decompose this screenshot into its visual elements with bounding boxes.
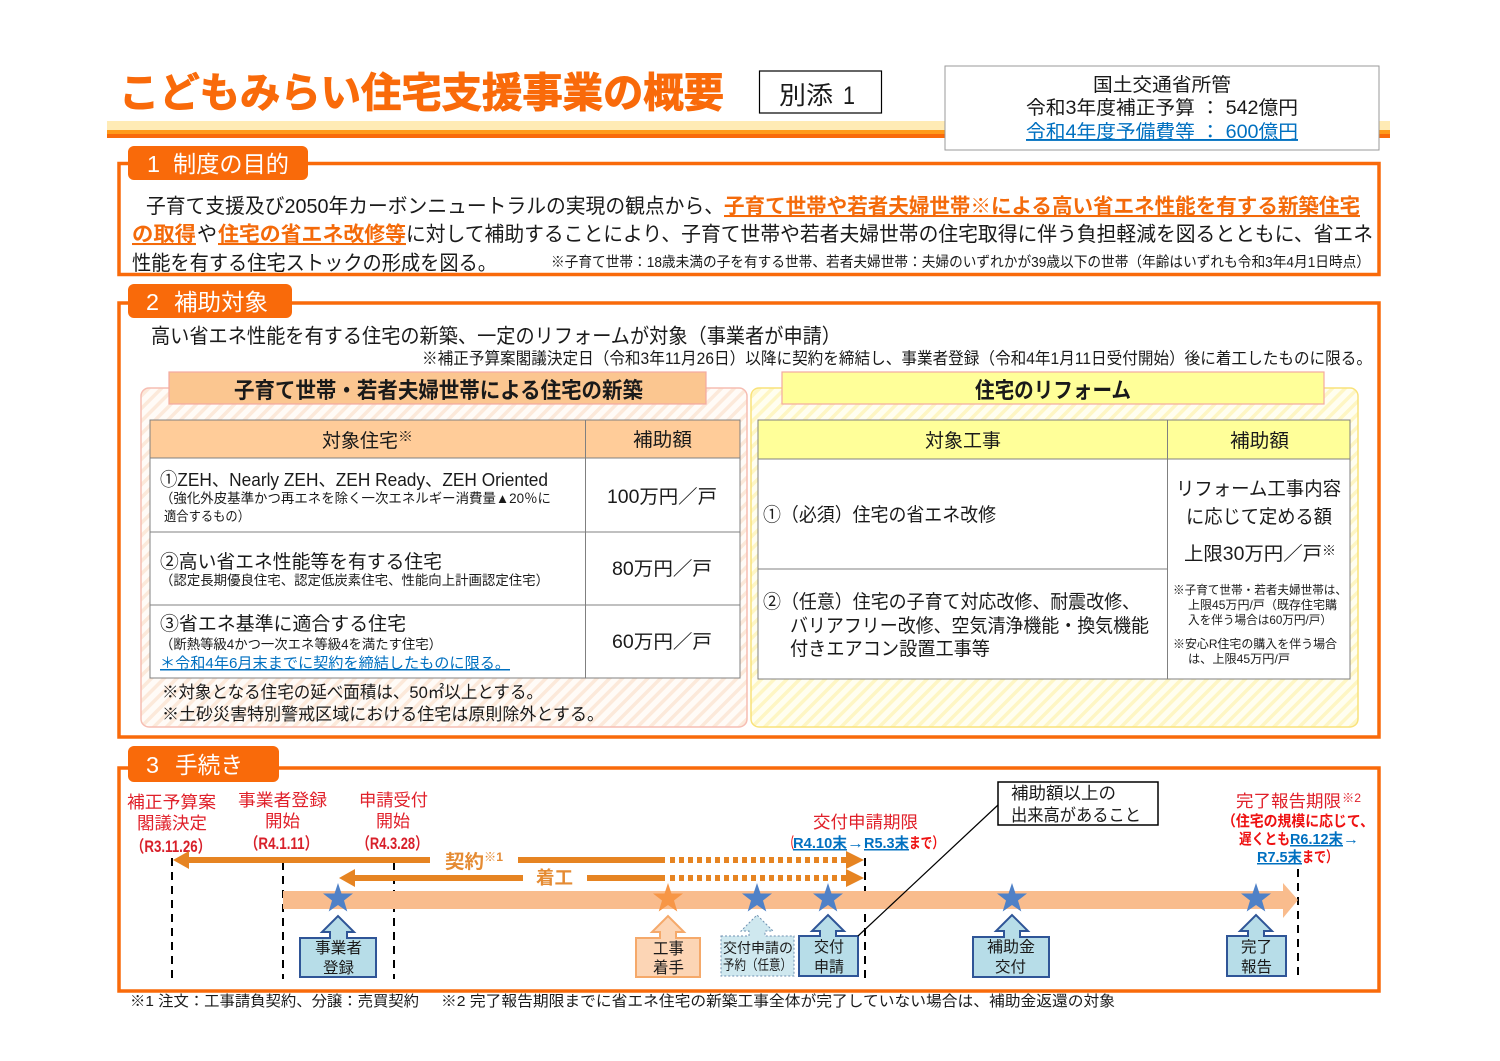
date label: completion report deadline: R7.5末 [1257, 848, 1302, 866]
table: new construction subsidies: ※ [398, 429, 413, 444]
budget box [945, 66, 1379, 150]
date label: completion report deadline: → [1343, 831, 1359, 848]
text block: purpose: 性能を有する住宅ストックの形成を図る。 [132, 252, 497, 275]
date label: completion report deadline: ※2 [1342, 791, 1361, 805]
panel: renovation [751, 372, 1358, 727]
panel: section 3 procedure [119, 746, 1379, 991]
step: subsidy payment: 交付 [995, 958, 1026, 976]
table: new construction subsidies: （強化外皮基準かつ再エネを除く一次エネルギー消費量▲20％に [160, 490, 551, 506]
table: new construction subsidies: ＊令和4年6月末までに契約を締結したものに限る。 [160, 655, 510, 672]
text block: purpose: 住宅の省エネ改修等 [218, 223, 406, 246]
date label: application deadline [786, 813, 944, 852]
table: new construction subsidies: （認定長期優良住宅、認定低炭素住宅、性能向上計画認定住宅） [160, 573, 549, 588]
table: new construction subsidies: 補助額 [633, 429, 692, 451]
attachment label: 別添 [779, 82, 833, 110]
arrow: contract period: ※1 [484, 850, 503, 864]
budget box: 令和3年度補正予算 ： 542億円 [1026, 97, 1298, 119]
icon: stars on the timeline [323, 883, 1271, 912]
heading: renovation: 住宅のリフォーム [975, 378, 1131, 403]
title underline band [107, 121, 1390, 138]
date label: cabinet decision: （R3.11.26） [131, 837, 211, 856]
arrow: construction start period: 着工 [536, 868, 573, 888]
text block: purpose [132, 195, 1373, 275]
date label: application start: 開始 [376, 812, 410, 831]
table: new construction subsidies: 60万円／戸 [612, 631, 712, 653]
date label: business registration start: 事業者登録 [238, 791, 327, 810]
arrow: main timeline band [283, 883, 1298, 918]
date label: application deadline: （ [786, 835, 794, 852]
heading: renovation [782, 372, 1324, 404]
table: renovation subsidies: ①（必須）住宅の省エネ改修 [763, 504, 996, 526]
footnotes: ※2 完了報告期限までに省エネ住宅の新築工事全体が完了していない場合は、補助金返還の対象 [441, 992, 1115, 1010]
table: renovation subsidies: 上限30万円／戸 [1184, 543, 1322, 565]
table: renovation subsidies: ※子育て世帯・若者夫婦世帯は、 [1173, 582, 1347, 597]
text block: purpose: や [197, 223, 217, 246]
date label: application deadline: R5.3末 [864, 834, 909, 852]
step: business registration: 事業者 [315, 939, 362, 957]
heading: section 1: 制度の目的 [173, 151, 289, 177]
date label: application deadline: R4.10末 [793, 834, 847, 852]
heading: new construction [169, 372, 706, 404]
arrow: construction start period [339, 868, 864, 888]
step: reservation of application [721, 915, 794, 976]
table: new construction subsidies: （断熱等級4かつ一次エネ等級4を満たす住宅） [160, 636, 442, 652]
table: new construction subsidies: ③省エネ基準に適合する住宅 [160, 613, 406, 635]
step: business registration: 登録 [323, 959, 354, 977]
table: renovation subsidies: は、上限45万円/戸 [1188, 652, 1290, 666]
date label: application start [357, 791, 428, 853]
step: completion report: 報告 [1241, 958, 1272, 976]
panel: section 1 purpose [119, 146, 1379, 275]
table: new construction subsidies: ①ZEH、Nearly ZEH、ZEH Ready、ZEH Oriented [160, 469, 548, 490]
date label: business registration start [238, 791, 327, 853]
panel: new construction [141, 372, 747, 727]
date label: cabinet decision: 閣議決定 [137, 814, 207, 833]
table: renovation subsidies: に応じて定める額 [1186, 506, 1332, 528]
heading: new construction: 子育て世帯・若者夫婦世帯による住宅の新築 [234, 378, 643, 403]
table: renovation subsidies: リフォーム工事内容 [1176, 478, 1341, 500]
step: grant application: 交付 [814, 938, 844, 956]
table: renovation subsidies [758, 420, 1350, 679]
date label: completion report deadline: （住宅の規模に応じて、 [1222, 812, 1374, 830]
heading: section 3: 手続き [175, 752, 243, 778]
arrow: contract period [173, 850, 864, 873]
notes: new construction: ※土砂災害特別警戒区域における住宅は原則除外とする。 [162, 705, 604, 724]
heading: section 1: 1 [147, 151, 160, 177]
date label: business registration start: 開始 [265, 812, 300, 831]
step: reservation of application: 交付申請の [723, 940, 793, 956]
notes: new construction: ※対象となる住宅の延べ面積は、50㎡以上とする。 [162, 683, 543, 702]
text block: purpose: の取得 [132, 223, 196, 246]
text block: purpose: に対して補助することにより、子育て世帯や若者夫婦世帯の住宅取得に伴う負担軽減を図るとともに、省エネ [406, 223, 1373, 246]
table: renovation subsidies: 上限45万円/戸（既存住宅購 [1188, 598, 1337, 612]
date label: application deadline: 交付申請期限 [813, 813, 918, 832]
callout: progress requirement: 出来高があること [1011, 806, 1141, 825]
text block: purpose: 子育て支援及び2050年カーボンニュートラルの実現の観点から、 [146, 195, 724, 218]
budget box: 国土交通省所管 [1093, 74, 1231, 96]
heading: section 1 [128, 146, 308, 180]
table: renovation subsidies: 対象工事 [925, 430, 1001, 452]
table: renovation subsidies: バリアフリー改修、空気清浄機能・換気機能 [790, 615, 1149, 637]
date label: completion report deadline [1222, 791, 1374, 866]
table: renovation subsidies: ※ [1322, 543, 1336, 558]
step: reservation of application: 予約（任意） [723, 957, 792, 973]
callout: progress requirement: 補助額以上の [1011, 784, 1116, 803]
heading: section 3: 3 [146, 752, 159, 778]
note: contract date: ※補正予算案閣議決定日（令和3年11月26日）以降に契約を締結し、事業者登録（令和4年1月11日受付開始）後に着工したものに限る。 [422, 349, 1372, 368]
text block: purpose: 子育て世帯や若者夫婦世帯※による高い省エネ性能を有する新築住宅 [724, 195, 1360, 218]
notes: new construction [162, 683, 604, 724]
table: new construction subsidies: 80万円／戸 [612, 558, 712, 580]
text block: eligibility summary: 高い省エネ性能を有する住宅の新築、一定のリフォームが対象（事業者が申請） [151, 325, 841, 348]
panel: section 2 eligibility [119, 284, 1379, 737]
date label: completion report deadline: まで） [1302, 849, 1338, 866]
table: new construction subsidies: 対象住宅 [322, 430, 398, 452]
step: grant application [799, 915, 858, 976]
step: completion report [1227, 915, 1286, 976]
date label: application deadline: まで） [909, 835, 944, 852]
date label: cabinet decision [127, 793, 216, 856]
footnotes: ※1 注文：工事請負契約、分譲：売買契約 [130, 993, 419, 1010]
budget box: 令和4年度予備費等 ： 600億円 [1026, 121, 1298, 143]
table: renovation subsidies: ※安心R住宅の購入を伴う場合 [1173, 637, 1337, 651]
step: business registration [300, 916, 376, 977]
table: renovation subsidies: 入を伴う場合は60万円/戸） [1188, 613, 1332, 627]
step: construction start: 着手 [653, 959, 684, 977]
table: renovation subsidies: 付きエアコン設置工事等 [790, 638, 990, 660]
table: new construction subsidies [150, 420, 740, 678]
heading: section 2: 補助対象 [174, 289, 268, 315]
heading: section 2 [128, 284, 292, 318]
date label: completion report deadline: 完了報告期限 [1236, 792, 1341, 811]
table: new construction subsidies: ②高い省エネ性能等を有する住宅 [160, 551, 442, 573]
footnotes [130, 992, 1115, 1010]
date label: application start: （R4.3.28） [357, 834, 428, 853]
step: construction start [636, 916, 700, 977]
date label: business registration start: （R4.1.11） [245, 834, 318, 853]
heading: section 2: 2 [146, 289, 159, 315]
heading: section 3 [128, 746, 279, 782]
date label: completion report deadline: 遅くとも [1239, 831, 1290, 848]
step: completion report: 完了 [1241, 938, 1272, 956]
table: renovation subsidies: 補助額 [1230, 430, 1289, 452]
title: こどもみらい住宅支援事業の概要 [119, 70, 724, 116]
date label: application deadline: → [847, 835, 864, 852]
table: new construction subsidies: 適合するもの） [164, 509, 250, 524]
step: subsidy payment: 補助金 [987, 938, 1035, 956]
date label: application start: 申請受付 [359, 791, 428, 810]
step: subsidy payment [973, 915, 1049, 977]
date label: completion report deadline: R6.12末 [1290, 830, 1343, 848]
date label: cabinet decision: 補正予算案 [127, 793, 216, 812]
table: new construction subsidies: 100万円／戸 [607, 486, 717, 508]
attachment label: 1 [843, 82, 855, 110]
callout: progress requirement [858, 782, 1158, 936]
footnote: household definition: ※子育て世帯：18歳未満の子を有する世帯、若者夫婦世帯：夫婦のいずれかが39歳以下の世帯（年齢はいずれも令和3年4月1日時点） [551, 253, 1370, 271]
step: construction start: 工事 [653, 940, 684, 958]
table: renovation subsidies: ②（任意）住宅の子育て対応改修、耐震改修、 [763, 591, 1140, 613]
arrow: contract period: 契約 [445, 851, 484, 873]
timeline dashed guides [172, 858, 1298, 979]
attachment label [760, 71, 882, 113]
step: grant application: 申請 [814, 958, 844, 976]
